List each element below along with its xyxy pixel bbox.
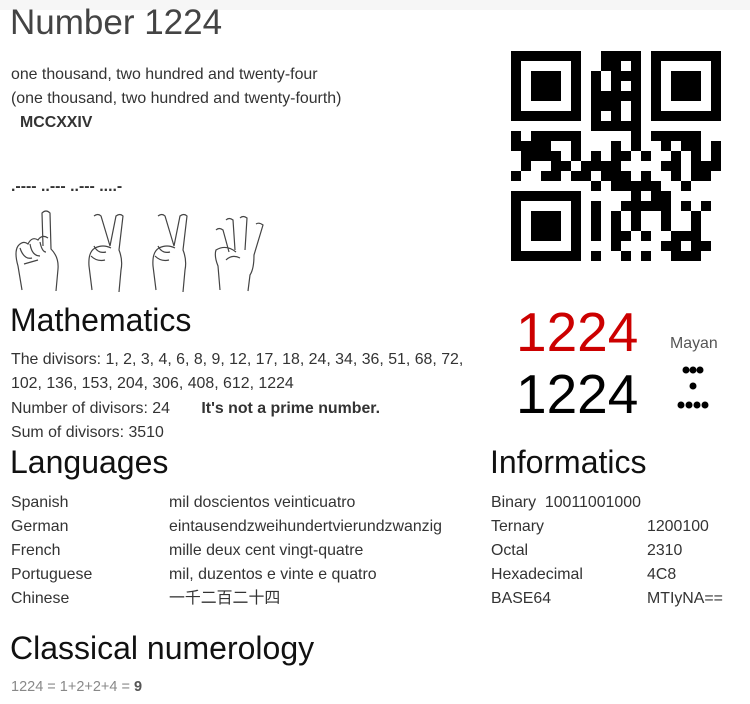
numerology line: 1224 = 1+2+2+4 = 9 [11,679,142,695]
text: mille deux cent vingt-quatre [169,542,363,559]
divisors text: Number of divisors: 24 It's not a prime number. [11,400,380,417]
informatics table: Hexadecimal [491,566,583,583]
text: 4C8 [647,566,676,583]
text: MTIyNA== [647,590,723,607]
number names: one thousand, two hundred and twenty-four [11,66,318,83]
text: mil doscientos veinticuatro [169,494,355,511]
black number: 1224 [516,363,638,425]
red number: 1224 [516,301,638,363]
divisors text [11,351,463,441]
Mayan numeral [678,366,708,408]
number names: (one thousand, two hundred and twenty-fourth) [11,90,341,107]
hands [15,210,264,292]
text: 一千二百二十四 [169,590,280,607]
Informatics heading: Informatics [490,444,646,480]
divisors text: 102, 136, 153, 204, 306, 408, 612, 1224 [11,375,294,392]
Classical numerology heading: Classical numerology [10,630,314,666]
QR code [511,51,721,261]
text: 2310 [647,542,682,559]
informatics table: Ternary [491,518,544,535]
informatics table: BASE64 [491,590,551,607]
text: 1200100 [647,518,709,535]
languages table: Chinese [11,590,69,607]
top bar [0,0,750,10]
morse: .---- ..--- ..--- ....- [11,178,122,195]
informatics table: Binary 10011001000 [491,494,641,511]
languages table: Portuguese [11,566,92,583]
languages table: Spanish [11,494,68,511]
informatics table: Octal [491,542,528,559]
informatics table [491,494,641,607]
divisors text: The divisors: 1, 2, 3, 4, 6, 8, 9, 12, 17, 18, 24, 34, 36, 51, 68, 72, [11,351,463,368]
text: mil, duzentos e vinte e quatro [169,566,377,583]
number names [11,66,341,131]
languages table: German [11,518,68,535]
Mathematics heading: Mathematics [10,302,191,338]
divisors text: Sum of divisors: 3510 [11,424,164,441]
Mayan label: Mayan [670,335,718,352]
languages table [11,494,92,607]
text: eintausendzweihundertvierundzwanzig [169,518,442,535]
number names: MCCXXIV [20,114,92,131]
title: Number 1224 [10,3,222,42]
languages table: French [11,542,60,559]
Languages heading: Languages [10,444,168,480]
